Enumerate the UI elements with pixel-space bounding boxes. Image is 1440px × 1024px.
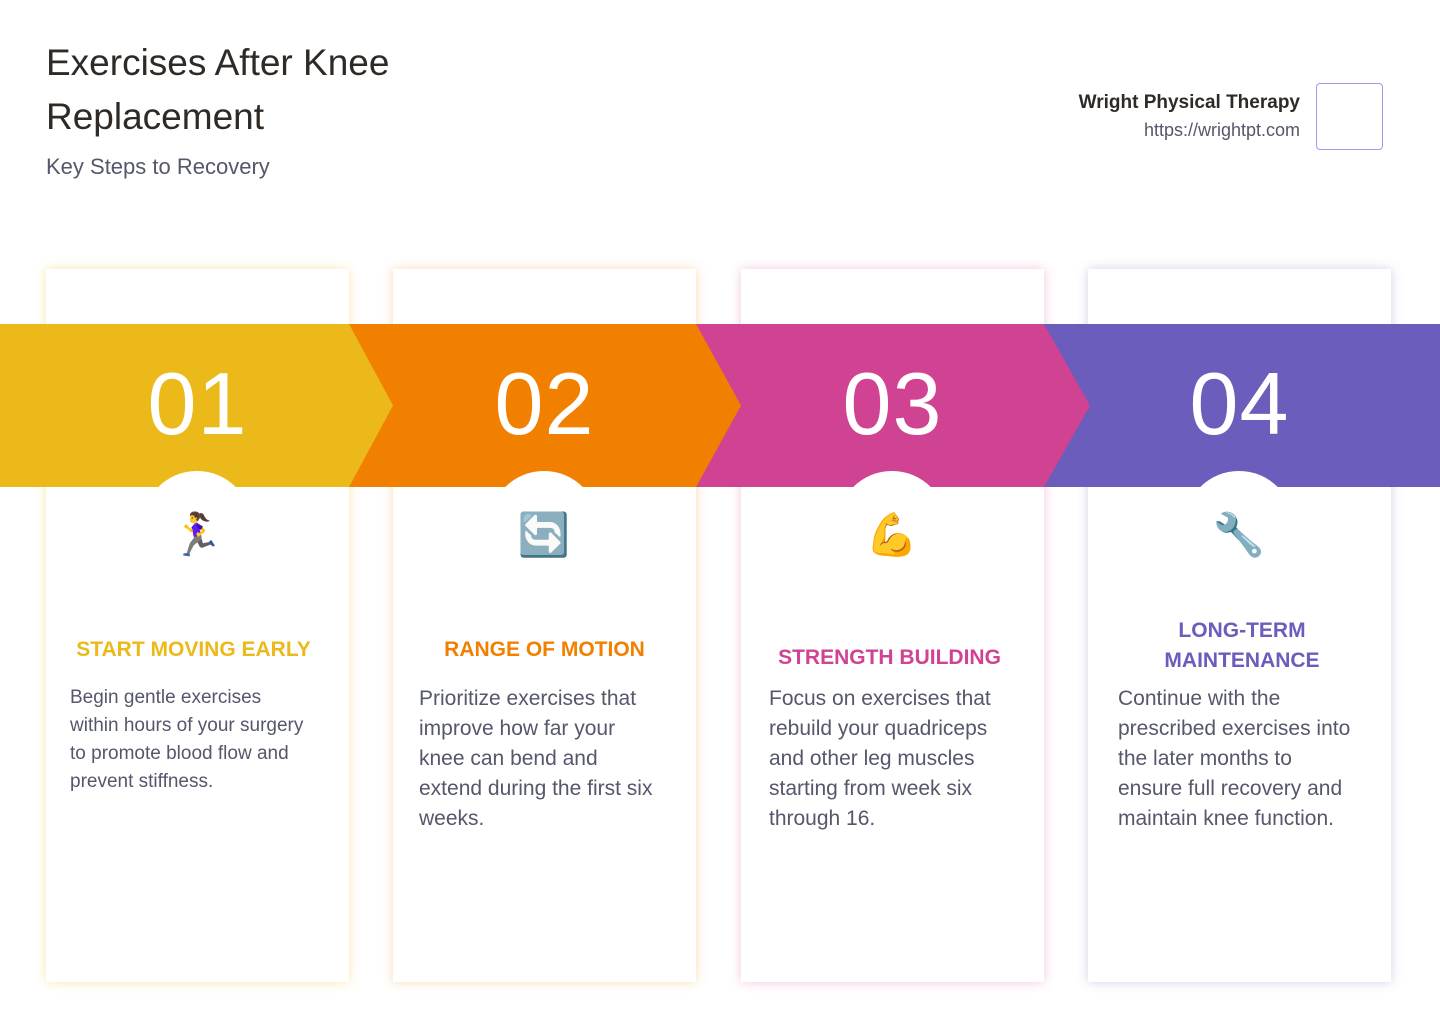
text: 04 (1190, 354, 1289, 453)
icon: cycle: 🔄 (518, 510, 570, 559)
title: Exercises After Knee Replacement (46, 42, 389, 137)
card 3 (741, 269, 1044, 982)
chevron band (0, 324, 1440, 487)
card 4 (1088, 269, 1391, 982)
card 1 (46, 269, 349, 982)
text: card 4: MAINTENANCE (1164, 649, 1320, 672)
icon: muscle: 💪 (866, 510, 918, 559)
numbers: 01 (148, 354, 247, 453)
text: 02 (495, 354, 594, 453)
logo placeholder (1316, 83, 1383, 150)
text: 03 (843, 354, 942, 453)
text: card 3: Focus on exercises that rebuild your quadriceps and other leg muscles starting from week six through 16. (769, 687, 991, 830)
brand block (1078, 92, 1300, 140)
text: card 2: RANGE OF MOTION (444, 638, 645, 661)
text: card 4: Continue with the prescribed exercises into the later months to ensure full recovery and maintain knee function. (1118, 687, 1350, 830)
text: card 4: LONG-TERM (1178, 619, 1306, 642)
text: card 2: Prioritize exercises that improve how far your knee can bend and extend during the first six weeks. (419, 687, 652, 830)
card 2 (393, 269, 696, 982)
text: card 1: Begin gentle exercises within hours of your surgery to promote blood flow and prevent stiffness. (70, 687, 303, 792)
brand block: Wright Physical Therapy (1079, 92, 1300, 113)
brand block: https://wrightpt.com (1144, 120, 1300, 140)
circles (142, 471, 252, 581)
text: card 1: START MOVING EARLY (76, 638, 311, 661)
text: card 3: STRENGTH BUILDING (778, 646, 1001, 669)
icon: runner: 🏃‍♀️ (171, 510, 223, 559)
text: card 1 (70, 638, 311, 792)
icon: wrench: 🔧 (1213, 510, 1265, 559)
subtitle: Key Steps to Recovery (46, 154, 270, 179)
text: card 4 (1118, 619, 1350, 830)
